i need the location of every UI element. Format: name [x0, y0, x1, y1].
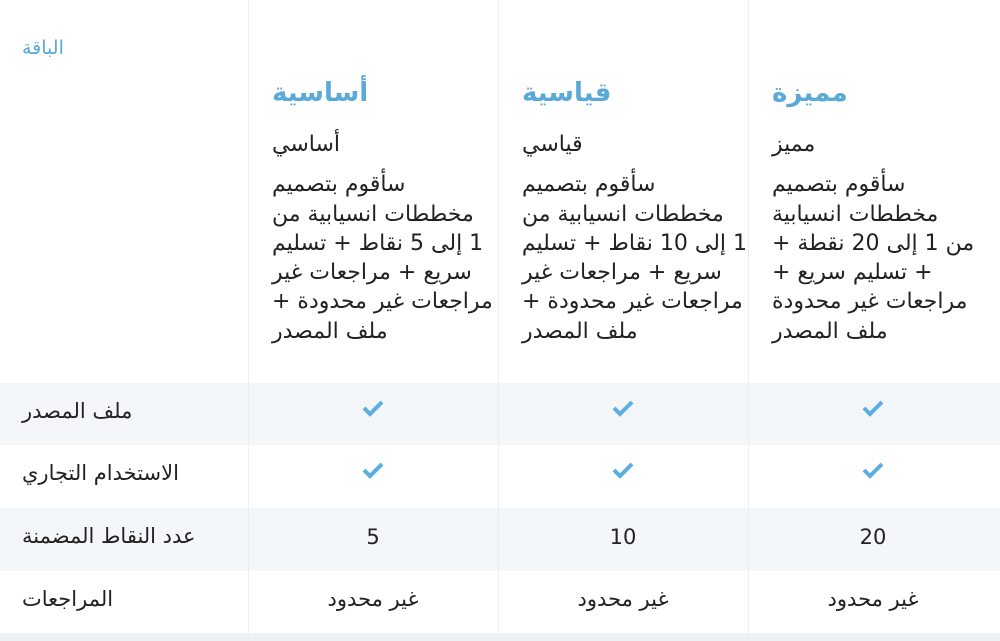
column: basic: مخططات انسيابية من: [272, 202, 474, 227]
column: premium: مميز: [772, 132, 815, 157]
column: premium: ملف المصدر: [772, 319, 888, 344]
column: premium: [771, 78, 974, 344]
column: premium: مميزة: [772, 78, 848, 108]
column: standard: سريع + مراجعات غير: [522, 260, 722, 285]
column: premium: مخططات انسيابية: [772, 202, 938, 227]
row: points: 5: [366, 525, 380, 549]
column: basic: سأقوم بتصميم: [272, 172, 405, 197]
row: source file: [21, 399, 884, 423]
column: basic: سريع + مراجعات غير: [272, 260, 472, 285]
column: basic: مراجعات غير محدودة +: [272, 289, 493, 314]
header label: الباقة: [22, 37, 64, 59]
column: standard: 1 إلى 10 نقاط + تسليم: [522, 231, 747, 256]
column: basic: أساسي: [272, 132, 340, 157]
column: basic: ملف المصدر: [272, 319, 388, 344]
column: standard: قياسية: [522, 78, 611, 108]
column: premium: مراجعات غير محدودة: [772, 289, 967, 314]
column: basic: 1 إلى 5 نقاط + تسليم: [272, 231, 483, 256]
row: revisions: غير محدود: [578, 587, 668, 611]
row: points: عدد النقاط المضمنة: [22, 524, 196, 548]
column: standard: قياسي: [522, 132, 583, 157]
row: revisions: [22, 587, 918, 611]
column: basic: أساسية: [272, 78, 368, 108]
column: standard: مخططات انسيابية من: [522, 202, 724, 227]
column: standard: ملف المصدر: [522, 319, 638, 344]
row: revisions: غير محدود: [828, 587, 918, 611]
row: points: 10: [610, 525, 636, 549]
row: points: [22, 524, 886, 549]
row: revisions: غير محدود: [328, 587, 418, 611]
column: standard: مراجعات غير محدودة +: [522, 289, 743, 314]
row: commercial use: [22, 461, 884, 485]
column: premium: سأقوم بتصميم: [772, 172, 905, 197]
row: source file: ملف المصدر: [22, 399, 132, 423]
column: premium: + تسليم سريع +: [772, 260, 933, 285]
column: standard: سأقوم بتصميم: [522, 172, 655, 197]
column: basic: [271, 75, 493, 344]
row: commercial use: الاستخدام التجاري: [22, 461, 179, 485]
column: standard: [521, 78, 747, 344]
row: revisions: المراجعات: [22, 587, 113, 611]
row: points: 20: [860, 525, 886, 549]
column: premium: من 1 إلى 20 نقطة +: [772, 231, 974, 256]
